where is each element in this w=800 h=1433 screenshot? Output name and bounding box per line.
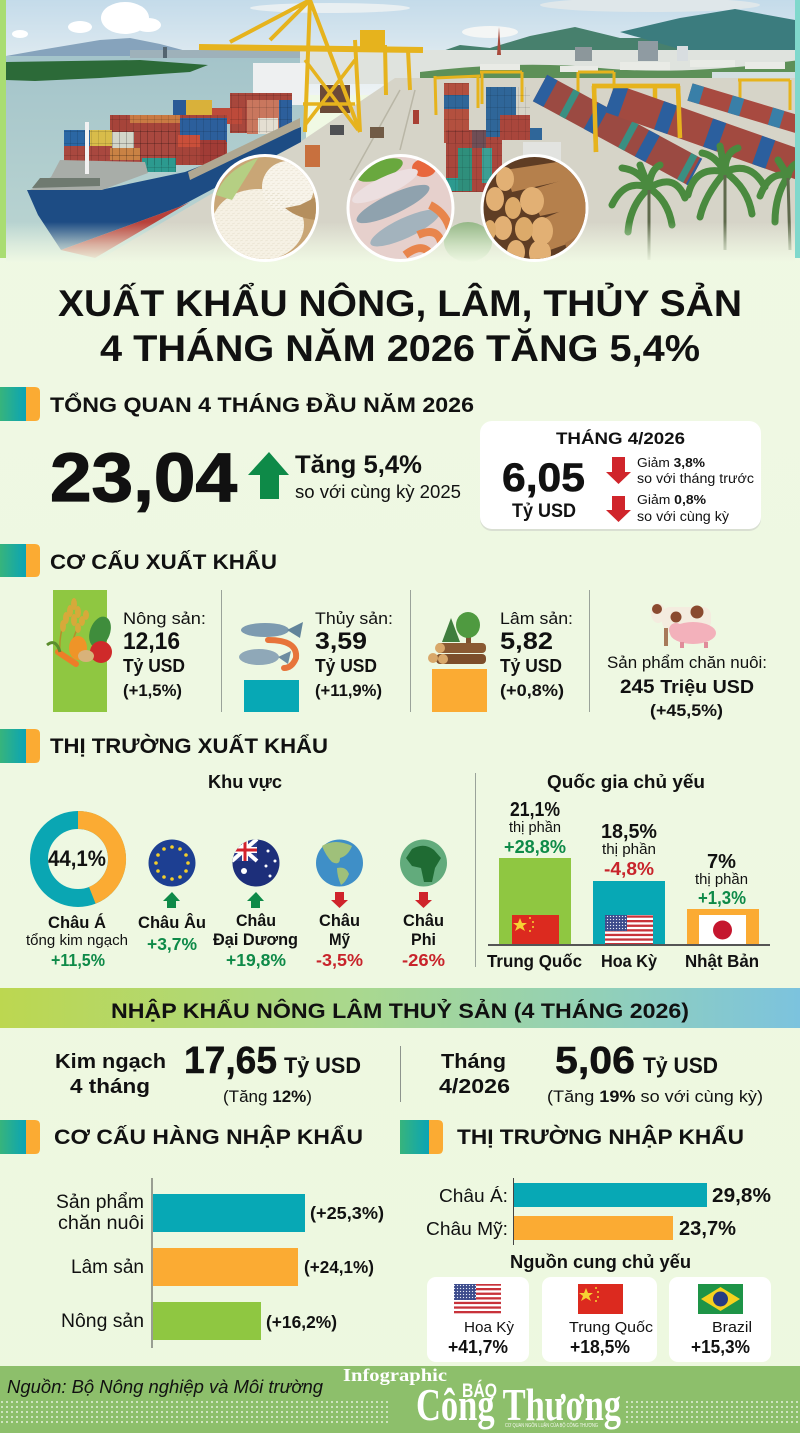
bar: agriculture <box>53 590 107 712</box>
section heading: overview: TỔNG QUAN 4 THÁNG ĐẦU NĂM 2026 <box>50 393 474 417</box>
bar chart: import structure: Sản phẩm <box>56 1192 144 1213</box>
flag: Japan <box>699 915 746 945</box>
panel: regions: Châu <box>403 911 444 930</box>
containers on ship <box>64 93 292 172</box>
panel: export structure: Tỷ USD <box>500 656 562 676</box>
panel: export structure <box>47 590 767 720</box>
card: April 2026: Giảm 3,8% <box>637 455 705 470</box>
card: USA <box>427 1277 529 1362</box>
panel: export structure: Nông sản: <box>123 609 206 628</box>
panel: main suppliers: Nguồn cung chủ yếu <box>510 1252 691 1272</box>
panel: export structure: Tỷ USD <box>315 656 377 676</box>
footer <box>0 1365 800 1433</box>
bar: United States <box>593 881 665 945</box>
source note: Nguồn: Bộ Nông nghiệp và Môi trường <box>7 1377 323 1397</box>
section heading: import structure: CƠ CẤU HÀNG NHẬP KHẨU <box>54 1124 363 1149</box>
panel: export structure: Lâm sản: <box>500 609 573 628</box>
bar chart: import markets: Châu Mỹ: <box>426 1218 508 1239</box>
card: Brazil: +15,3% <box>691 1337 750 1357</box>
panel: export structure: 245 Triệu USD <box>620 677 754 698</box>
panel: main countries: -4,8% <box>604 859 654 879</box>
bar chart: import markets: 29,8% <box>712 1185 771 1207</box>
panel: main suppliers <box>427 1252 771 1362</box>
logo: Báo Công Thương: Infographic <box>343 1365 447 1385</box>
panel: main countries: 21,1% <box>510 799 560 821</box>
panel: regions: Châu <box>319 911 360 930</box>
imports summary: 4 months: 4 tháng <box>70 1075 150 1098</box>
card: USA: Hoa Kỳ <box>464 1319 514 1336</box>
icon: Africa globe <box>400 840 447 886</box>
card: April 2026: THÁNG 4/2026 <box>556 429 685 448</box>
imports summary: 4 months: Tỷ USD <box>284 1053 361 1078</box>
panel: main countries: thị phần <box>509 819 561 836</box>
card: April 2026: Tỷ USD <box>512 501 576 522</box>
bar: China <box>499 858 571 945</box>
overview total figure: so với cùng kỳ 2025 <box>295 482 461 502</box>
imports summary: April: Tỷ USD <box>643 1053 718 1078</box>
imports summary: 4 months: 17,65 <box>184 1040 277 1082</box>
icon: green up arrow <box>248 452 289 499</box>
overview total figure <box>50 439 461 516</box>
rice circle <box>210 154 320 265</box>
card: April 2026: so với cùng kỳ <box>637 509 729 524</box>
icon: fish and shrimp <box>239 622 303 668</box>
logo: Báo Công Thương: CƠ QUAN NGÔN LUẬN CỦA BỘ CÔNG THƯƠNG <box>505 1422 598 1429</box>
panel: main countries: Quốc gia chủ yếu <box>547 772 705 792</box>
panel: main countries: 7% <box>707 851 736 873</box>
section heading: overview <box>0 387 474 421</box>
panel: main countries: thị phần <box>695 871 748 888</box>
imports summary: April <box>439 1040 763 1106</box>
panel: export structure: (+1,5%) <box>123 682 182 700</box>
panel: main countries <box>487 772 770 971</box>
banner: imports heading <box>0 988 800 1028</box>
title: XUẤT KHẨU NÔNG, LÂM, THỦY SẢN <box>58 282 742 324</box>
imports summary: April: 4/2026 <box>439 1075 510 1098</box>
flag: China <box>512 915 559 945</box>
card: April 2026: so với tháng trước <box>637 471 754 486</box>
card: April 2026: 6,05 <box>502 456 585 500</box>
card: April 2026 <box>480 421 761 531</box>
imports summary: 4 months: Kim ngạch <box>55 1050 166 1073</box>
panel: export structure: 3,59 <box>315 628 367 655</box>
ship hull <box>27 127 301 250</box>
yard rows <box>540 88 800 172</box>
panel: export structure: (+45,5%) <box>650 701 723 720</box>
overview total figure: Tăng 5,4% <box>295 451 422 479</box>
panel: regions: Châu <box>236 911 276 930</box>
title: 4 THÁNG NĂM 2026 TĂNG 5,4% <box>100 328 700 369</box>
panel: regions: Châu Âu <box>138 913 206 932</box>
panel: regions: Khu vực <box>208 772 282 792</box>
imports summary: April: Tháng <box>441 1050 506 1073</box>
card: China <box>542 1277 657 1362</box>
panel: main countries: +28,8% <box>504 837 566 857</box>
cranes <box>199 0 790 152</box>
bar chart: import structure: chăn nuôi <box>58 1213 144 1234</box>
panel: export structure: Sản phẩm chăn nuôi: <box>607 654 767 672</box>
bar chart: import markets <box>426 1178 771 1245</box>
bar chart: import structure: (+25,3%) <box>310 1203 384 1223</box>
logs circle <box>480 154 592 266</box>
panel: regions: Châu Á <box>48 913 106 932</box>
imports summary: April: 5,06 <box>555 1040 635 1082</box>
card: Brazil <box>669 1277 771 1362</box>
logo: Báo Công Thương: Công Thương <box>416 1379 621 1430</box>
bar chart: import structure <box>56 1178 384 1348</box>
panel: export structure: (+0,8%) <box>500 682 564 700</box>
flag: USA <box>605 915 653 945</box>
icon: down arrow Americas <box>331 892 348 908</box>
panel: export structure: 5,82 <box>500 628 553 655</box>
panel: export structure: (+11,9%) <box>315 682 382 700</box>
panel: regions: Đại Dương <box>213 930 298 949</box>
section heading: import structure <box>0 1120 363 1154</box>
card: April 2026: Giảm 0,8% <box>637 492 706 507</box>
section heading: export markets: THỊ TRƯỜNG XUẤT KHẨU <box>50 734 328 758</box>
donut chart: Asia share: 44,1% <box>48 846 106 871</box>
section heading: export structure: CƠ CẤU XUẤT KHẨU <box>50 551 277 574</box>
bar chart: import structure: (+24,1%) <box>304 1257 374 1277</box>
panel: main countries: thị phần <box>602 841 656 858</box>
palms <box>612 146 800 232</box>
icon: grain and vegetables <box>47 598 115 664</box>
logo: Báo Công Thương <box>343 1365 621 1430</box>
icon: globe Americas <box>316 840 363 886</box>
panel: regions: -3,5% <box>316 950 363 970</box>
icon: red down arrow 2 <box>606 496 631 522</box>
card: Brazil: Brazil <box>712 1319 752 1336</box>
bar chart: import markets: Châu Á: <box>439 1185 508 1206</box>
panel: regions <box>26 772 447 970</box>
bar chart: import structure: (+16,2%) <box>266 1312 337 1332</box>
logo: Báo Công Thương: BÁO <box>462 1380 497 1402</box>
banner: imports heading: NHẬP KHẨU NÔNG LÂM THUỶ SẢN (4 THÁNG 2026) <box>111 999 689 1023</box>
icon: down arrow Africa <box>415 892 432 908</box>
panel: main countries: +1,3% <box>698 888 746 908</box>
panel: regions: -26% <box>402 950 445 970</box>
panel: regions: Mỹ <box>329 930 350 949</box>
bar chart: import structure: Lâm sản <box>71 1257 144 1278</box>
panel: main countries: 18,5% <box>601 821 657 843</box>
bar chart: import markets: 23,7% <box>679 1218 736 1240</box>
panel: regions: +11,5% <box>51 950 105 970</box>
icon: Australia flag <box>232 839 280 886</box>
panel: regions: +3,7% <box>147 934 197 954</box>
overview total figure: 23,04 <box>50 439 237 516</box>
imports summary: April: (Tăng 19% so với cùng kỳ) <box>547 1087 763 1106</box>
donut chart: Asia share <box>39 820 117 898</box>
section heading: export structure <box>0 544 277 577</box>
panel: export structure: Thủy sản: <box>315 609 393 628</box>
icon: cow and pig <box>651 603 716 648</box>
panel: regions: +19,8% <box>226 950 286 970</box>
panel: export structure: Tỷ USD <box>123 656 185 676</box>
icon: trees and logs <box>428 612 486 664</box>
section heading: export markets <box>0 729 328 763</box>
hero photo: container port <box>0 0 800 266</box>
panel: main countries: Nhật Bản <box>685 951 759 971</box>
icon: EU flag <box>148 840 196 886</box>
icon: red down arrow 1 <box>606 457 631 484</box>
card: China: Trung Quốc <box>569 1319 654 1336</box>
imports summary: 4 months: (Tăng 12%) <box>223 1087 312 1106</box>
imports summary: 4 months <box>55 1040 361 1106</box>
bar chart: import structure: Nông sản <box>61 1311 144 1332</box>
panel: regions: tổng kim ngạch <box>26 933 128 949</box>
bar: forestry <box>432 669 487 712</box>
bar: Japan <box>687 909 759 945</box>
icon: up arrow Europe <box>163 892 180 908</box>
panel: export structure: 12,16 <box>123 628 180 655</box>
title <box>58 282 742 369</box>
panel: regions: Phi <box>411 930 436 949</box>
panel: main countries: Trung Quốc <box>487 951 582 971</box>
icon: up arrow Oceania <box>247 892 264 908</box>
card: USA: +41,7% <box>448 1337 508 1357</box>
bar: fishery <box>244 680 299 712</box>
section heading: import markets: THỊ TRƯỜNG NHẬP KHẨU <box>457 1124 744 1149</box>
card: China: +18,5% <box>570 1337 630 1357</box>
panel: main countries: Hoa Kỳ <box>601 951 657 971</box>
section heading: import markets <box>400 1120 744 1154</box>
seafood circle <box>345 153 457 265</box>
